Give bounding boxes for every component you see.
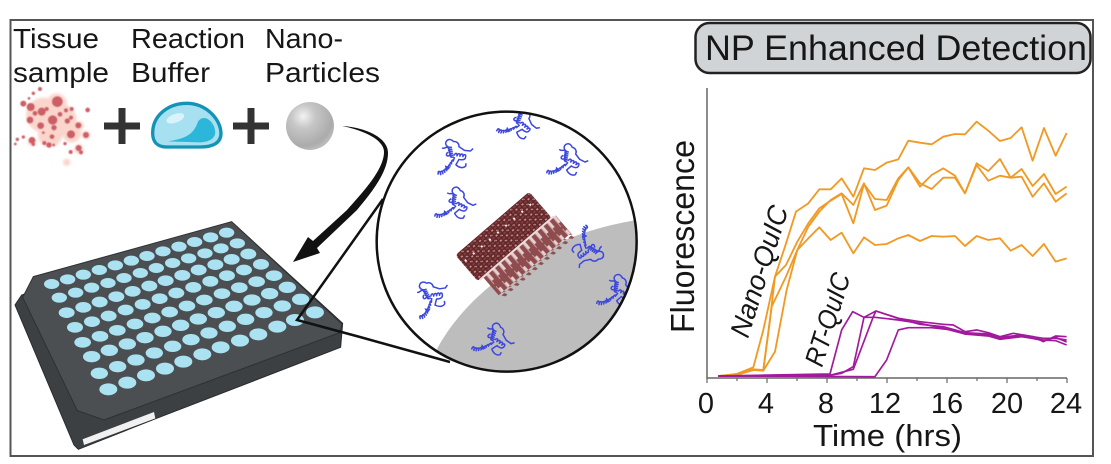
x tick labels: 16 <box>931 388 963 420</box>
series label: RT-QuIC: RT-QuIC <box>799 269 857 370</box>
zoom lines from well to lens <box>297 199 450 362</box>
label: tissue sample: Tissue <box>13 23 99 54</box>
plate body <box>15 223 343 449</box>
nanoparticle surface <box>437 219 647 377</box>
label: tissue sample <box>13 23 109 88</box>
lens outline <box>377 112 637 372</box>
label: reaction buffer: Buffer <box>131 57 210 88</box>
title pill: NP Enhanced Detection <box>705 29 1087 68</box>
icon: tissue sample <box>14 87 90 166</box>
label: reaction buffer: Reaction <box>131 23 245 54</box>
axes <box>707 88 1067 378</box>
x tick labels: 8 <box>818 388 834 420</box>
plate top face <box>23 222 342 420</box>
label: reaction buffer <box>131 23 245 88</box>
label: tissue sample: sample <box>13 57 109 88</box>
wells <box>44 228 324 395</box>
icon: plus 1 <box>104 108 140 144</box>
x tick labels <box>698 388 1082 420</box>
icon: buffer droplet <box>153 103 221 147</box>
series label: Nano-QuIC: Nano-QuIC <box>724 201 795 341</box>
icon: nanoparticle sphere <box>286 102 334 150</box>
well plate <box>15 222 343 449</box>
y axis title: Fluorescence <box>664 140 701 333</box>
label: nanoparticles <box>265 23 380 88</box>
purple series: RT-QuIC <box>718 311 1067 377</box>
arrow: nanoparticles into plate <box>293 126 388 262</box>
plate label sticker <box>83 412 155 445</box>
x tick labels: 4 <box>758 388 774 420</box>
x tick labels: 20 <box>991 388 1023 420</box>
line chart <box>664 88 1082 453</box>
label: nanoparticles: Nano- <box>265 23 343 54</box>
x tick labels: 24 <box>1050 388 1082 420</box>
orange series: Nano-QuIC <box>718 122 1067 376</box>
icon: plus 2 <box>233 108 269 144</box>
magnified lens <box>377 102 647 377</box>
x axis title: Time (hrs) <box>813 418 962 453</box>
x tick labels: 0 <box>698 388 714 420</box>
x tick labels: 12 <box>869 388 901 420</box>
label: nanoparticles: Particles <box>265 57 380 88</box>
free proteins <box>404 102 638 357</box>
amyloid fibril <box>455 188 575 304</box>
